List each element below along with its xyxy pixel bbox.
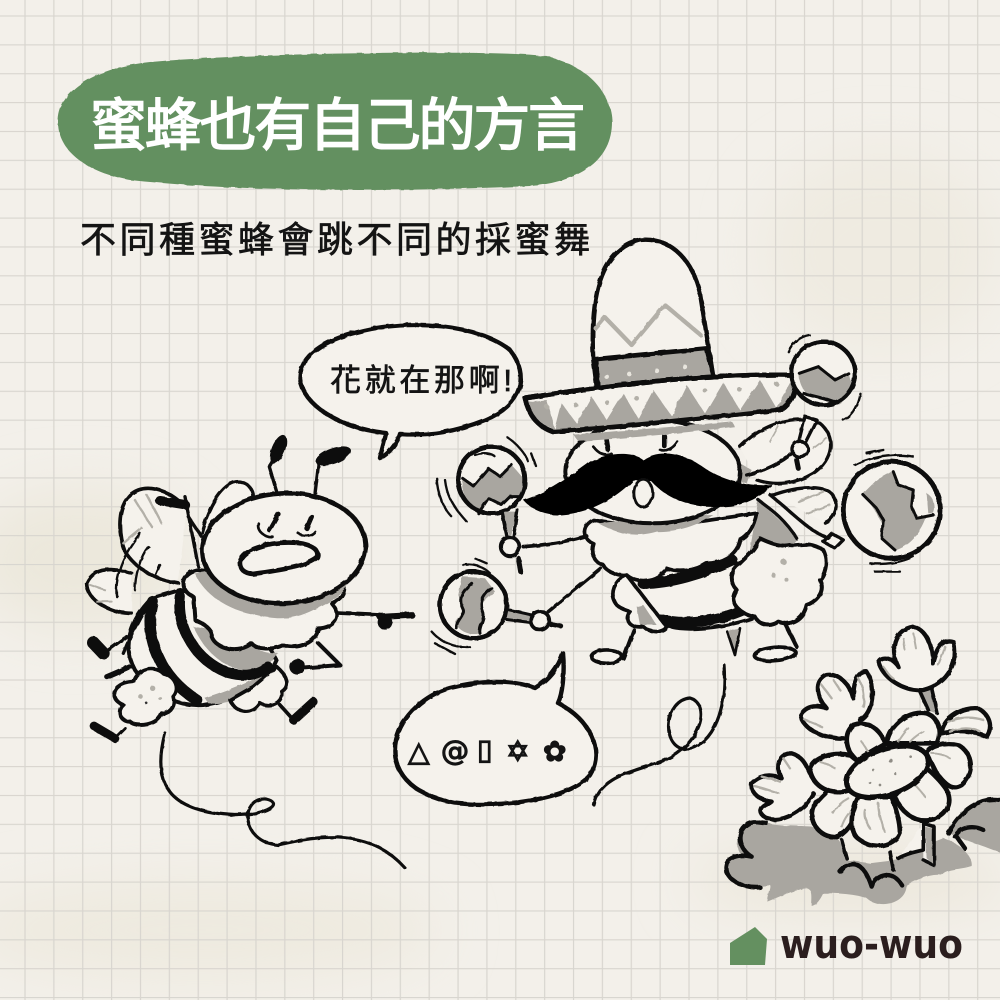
big pollen sack [731,538,826,625]
bee body [123,590,278,705]
moustache [523,454,773,515]
pollen sack right [230,667,287,712]
flower cluster [725,627,1000,906]
bush outlines [726,799,1000,887]
left bee [87,433,412,738]
bee arm pointing [160,497,412,630]
bee antennae [266,433,353,494]
logo [730,922,963,968]
bubble 2 symbols: △ [408,735,430,768]
bee collar fluff [183,560,355,649]
bubble 2 symbols: @ [441,734,469,767]
bubble 2 symbols: ✿ [543,735,566,768]
right bee head [565,420,740,523]
flower petals [810,713,971,846]
bee legs [93,637,340,738]
right bee legs [591,623,797,663]
bee head [200,489,368,608]
left leaf [751,753,813,820]
right bee collar fluff [585,513,757,581]
right leaf [942,708,990,737]
logo wordmark: wuo-wuo [780,922,963,968]
bubble 2 symbols: ✡ [506,735,529,768]
right bee wings [735,419,836,523]
bubble 1 text: 花就在那啊! [330,363,512,398]
flower center [839,736,935,808]
speech bubble: dance symbols [395,653,596,804]
right bee with sombrero [432,240,940,663]
top bud [878,627,955,690]
maraca right large [770,450,940,572]
bee wings [87,482,253,613]
maraca left upper [437,437,587,572]
maraca left lower [432,558,601,654]
grey bush right [950,799,1000,853]
bubble 2 symbols [408,733,566,768]
speech bubble: flower location [300,325,521,458]
pollen sack left [114,669,177,725]
bubble 2 symbols: ▯ [477,733,492,766]
grey bush [725,823,972,906]
upper left leaf [801,672,872,738]
sombrero [525,240,795,441]
stems [842,823,934,870]
flight path: right bee [594,665,724,805]
title text: 蜜蜂也有自己的方言 [90,94,585,158]
small pollen sack [613,575,667,632]
title banner [58,53,612,190]
flight path: left bee [161,733,405,868]
logo house icon [730,927,767,965]
right bee body [627,500,797,655]
bee mouth [240,543,318,574]
maraca top right [747,335,860,475]
subtitle: 不同種蜜蜂會跳不同的採蜜舞 [80,219,590,260]
nose [634,479,653,507]
